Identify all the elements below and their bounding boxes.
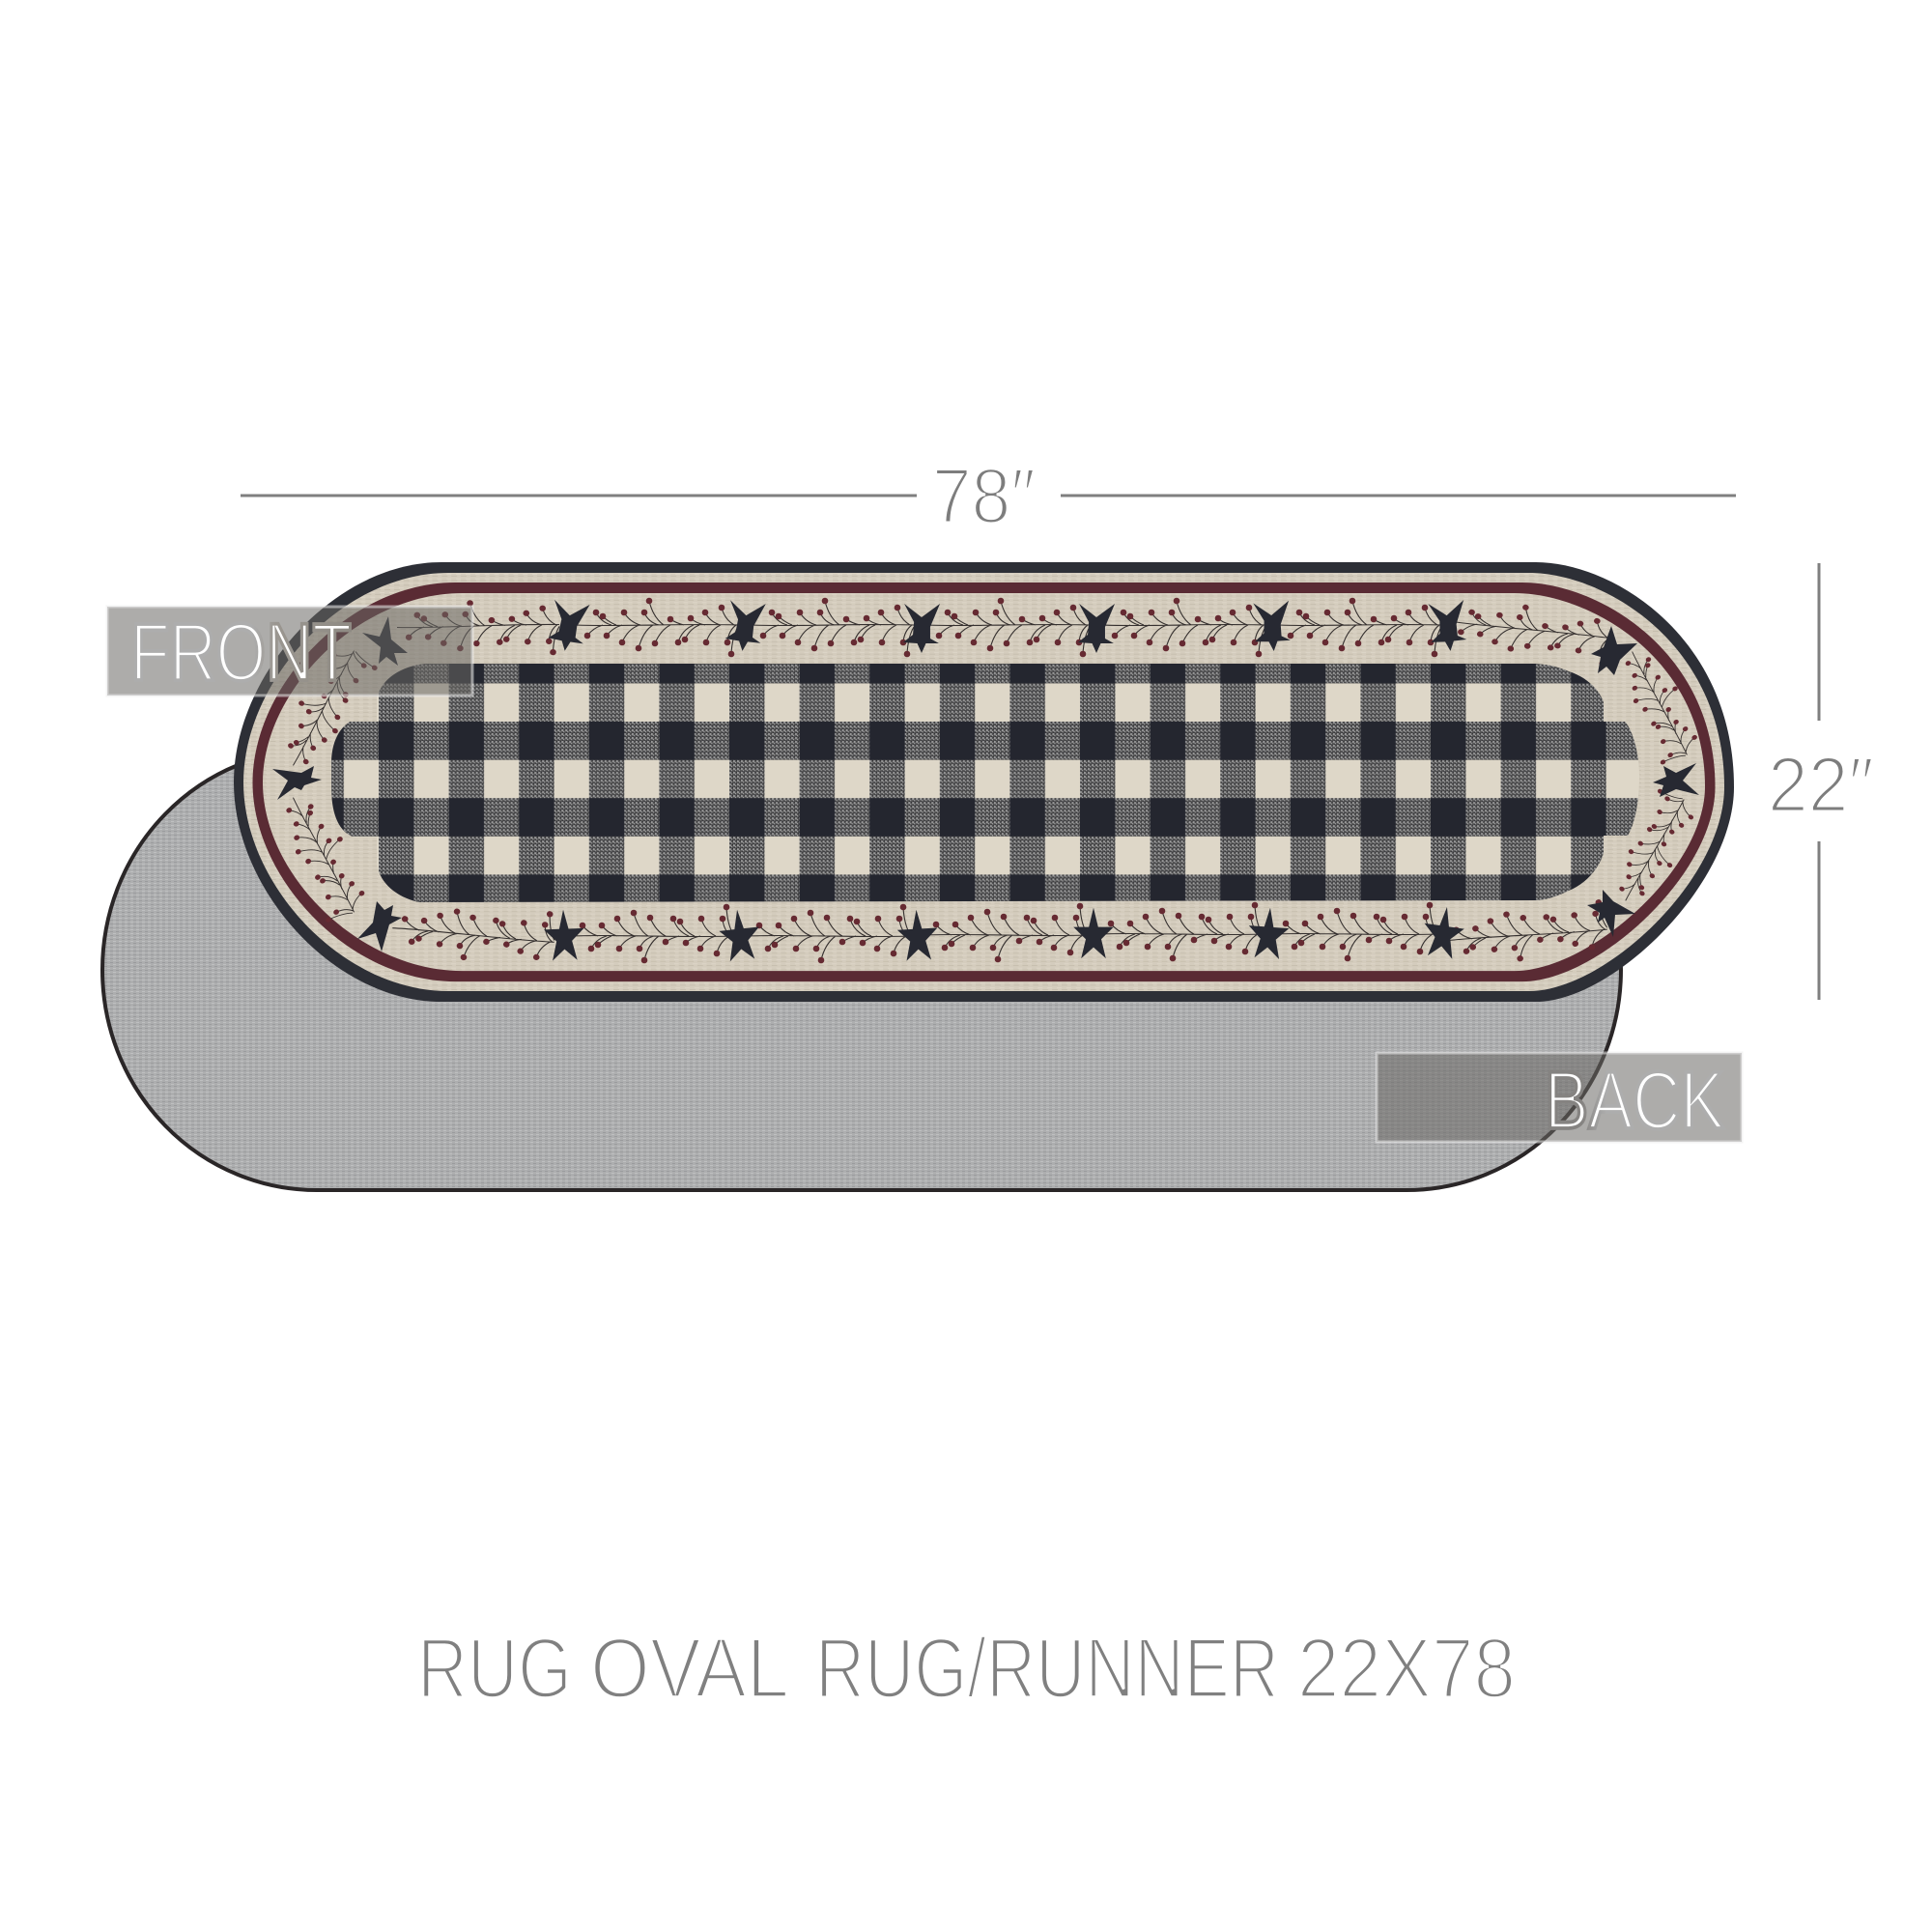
stars (272, 600, 1699, 962)
title caption: RUG/RUNNER (815, 1620, 1279, 1716)
outer dark braid border (234, 562, 1734, 1002)
label: FRONT: FRONT (130, 607, 352, 697)
label: BACK: BACK (1545, 1055, 1724, 1146)
buffalo check centre (328, 662, 1642, 905)
cream inner field (263, 593, 1705, 971)
title caption: 22X78 (1297, 1620, 1516, 1716)
width dimension: 78 inches (241, 453, 1736, 540)
label: BACK (1377, 1053, 1742, 1146)
width dimension: 78 inches: 78″ (932, 453, 1036, 540)
title caption: OVAL (590, 1620, 787, 1716)
maroon stripe (252, 582, 1716, 981)
rug back view (102, 750, 1621, 1190)
cream outer band (243, 573, 1724, 991)
height dimension: 22 inches (1768, 563, 1874, 1000)
title caption (417, 1620, 1516, 1716)
rug front view (234, 562, 1734, 1002)
height dimension: 22 inches: 22″ (1768, 742, 1874, 829)
berry vines (268, 597, 1708, 968)
title caption: RUG (417, 1620, 572, 1716)
